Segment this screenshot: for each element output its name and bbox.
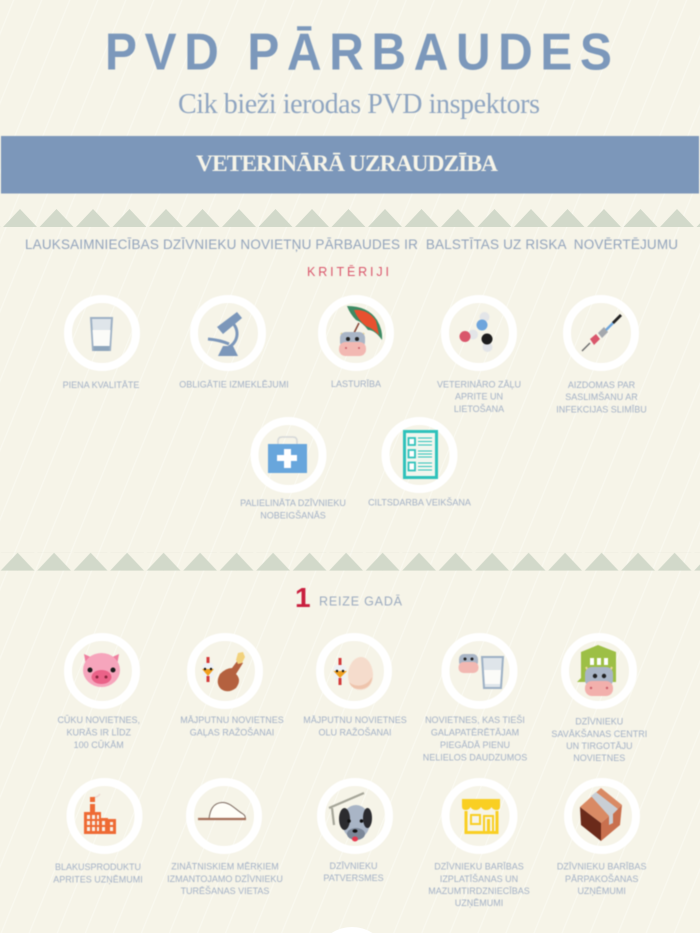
item: piena kvalitāte: PIENA KVALITĀTE <box>63 380 139 390</box>
item: dzīvnieku barības izplatīšanas uzņēmumi: MAZUMTIRDZNIECĪBAS <box>428 886 530 896</box>
item: dzīvnieku barības pārpakošanas uzņēmumi: UZŅĒMUMI <box>577 886 626 896</box>
heading: 1 reize gadā: 1 <box>295 582 311 613</box>
intro text: LAUKSAIMNIECĪBAS DZĪVNIEKU NOVIETŅU PĀRBAUDES IR BALSTĪTAS UZ RISKA NOVĒRTĒJUMU <box>25 237 678 252</box>
partial circle at bottom edge <box>332 927 372 933</box>
item: lasturība <box>322 299 390 389</box>
item: mājputnu novietnes olu ražošanai: MĀJPUTNU NOVIETNES <box>303 715 407 725</box>
item: aizdomas par saslimšanu: INFEKCIJAS SLIMĪBU <box>556 404 647 414</box>
item: lasturība: LASTURĪBA <box>331 379 381 389</box>
item: aizdomas par saslimšanu: SASLIMŠANU AR <box>565 392 638 402</box>
item: dzīvnieku barības izplatīšanas uzņēmumi: IZPLATĪŠANAS UN <box>440 874 518 884</box>
item: novietnes, kas piegādā pienu: NELIELOS DAUDZUMOS <box>423 752 527 762</box>
item: dzīvnieku patversmes <box>321 782 389 883</box>
item: dzīvnieku barības pārpakošanas uzņēmumi <box>557 782 646 896</box>
item: mājputnu novietnes olu ražošanai: OLU RAŽOŠANAI <box>318 728 392 738</box>
item: novietnes, kas piegādā pienu: NOVIETNES, KAS TIEŠI <box>425 715 525 725</box>
item: palielināta dzīvnieku nobeigšanās: PALIELINĀTA DZĪVNIEKU <box>240 498 346 508</box>
item: dzīvnieku barības pārpakošanas uzņēmumi: PĀRPAKOŠANAS <box>565 874 638 884</box>
item: dzīvnieku patversmes: DZĪVNIEKU <box>329 861 378 871</box>
item: dzīvnieku savākšanas centri: SAVĀKŠANAS CENTRI <box>551 729 647 739</box>
item: novietnes, kas piegādā pienu <box>423 637 527 762</box>
item: novietnes, kas piegādā pienu: PIEGĀDĀ PIENU <box>440 740 510 750</box>
item: dzīvnieku savākšanas centri: UN TIRGOTĀJU <box>566 741 632 751</box>
item: aizdomas par saslimšanu: AIZDOMAS PAR <box>568 380 636 390</box>
item: veterināro zāļu aprite: LIETOŠANA <box>454 404 504 414</box>
item: palielināta dzīvnieku nobeigšanās: NOBEIGŠANĀS <box>260 510 326 520</box>
item: veterināro zāļu aprite: APRITE UN <box>455 392 503 402</box>
item: dzīvnieku barības izplatīšanas uzņēmumi <box>428 782 530 908</box>
item: mājputnu novietnes gaļas ražošanai: MĀJPUTNU NOVIETNES <box>180 715 284 725</box>
item: dzīvnieku barības izplatīšanas uzņēmumi: UZŅĒMUMI <box>455 898 503 908</box>
item: mājputnu novietnes gaļas ražošanai: GAĻAS RAŽOŠANAI <box>190 728 274 738</box>
item: cūku novietnes: 100 CŪKĀM <box>74 740 124 750</box>
item: dzīvnieku barības pārpakošanas uzņēmumi: DZĪVNIEKU BARĪBAS <box>557 862 646 872</box>
heading: 1 reize gadā: REIZE GADĀ <box>319 594 403 608</box>
item: dzīvnieku patversmes: PATVERSMES <box>323 873 384 883</box>
item: veterināro zāļu aprite <box>437 299 521 414</box>
item: mājputnu novietnes gaļas ražošanai <box>180 637 284 738</box>
item: zinātniskiem mērķiem izmantojamo dzīvnieku turēšanas vietas: ZINĀTNISKIEM MĒRĶIEM <box>171 862 279 872</box>
banner: veterinārā uzraudzība: VETERINĀRĀ UZRAUDZĪBA <box>196 151 498 177</box>
item: zinātniskiem mērķiem izmantojamo dzīvnieku turēšanas vietas <box>167 782 283 896</box>
item: blakusproduktu aprites uzņēmumi: APRITES UZŅĒMUMI <box>53 875 143 885</box>
item: dzīvnieku barības izplatīšanas uzņēmumi: DZĪVNIEKU BARĪBAS <box>434 862 524 872</box>
item: palielināta dzīvnieku nobeigšanās <box>240 421 346 520</box>
item: blakusproduktu aprites uzņēmumi: BLAKUSPRODUKTU <box>55 862 141 872</box>
item: cūku novietnes: CŪKU NOVIETNES, <box>57 715 140 725</box>
banner: veterinārā uzraudzība <box>1 136 699 194</box>
item: mājputnu novietnes olu ražošanai <box>303 637 407 738</box>
item: zinātniskiem mērķiem izmantojamo dzīvnieku turēšanas vietas: IZMANTOJAMO DZĪVNIEKU <box>167 874 283 884</box>
panel: criteria <box>63 299 647 520</box>
triangle band top <box>0 209 700 227</box>
item: cūku novietnes: KURĀS IR LĪDZ <box>66 728 131 738</box>
heading: kritēriji: KRITĒRIJI <box>307 265 389 279</box>
item: veterināro zāļu aprite: VETERINĀRO ZĀĻU <box>437 380 521 390</box>
item: obligātie izmeklējumi: OBLIGĀTIE IZMEKLĒJUMI <box>179 380 289 390</box>
item: ciltsdarba veikšana: CILTSDARBA VEIKŠANA <box>368 498 471 508</box>
item: cūku novietnes <box>57 637 140 750</box>
item: dzīvnieku savākšanas centri: DZĪVNIEKU <box>575 717 623 727</box>
item: dzīvnieku savākšanas centri: NOVIETNES <box>573 753 625 763</box>
panel: once a year <box>53 637 647 908</box>
item: dzīvnieku savākšanas centri <box>551 637 647 763</box>
subtitle: Cik bieži ierodas PVD inspektors <box>178 89 540 120</box>
item: aizdomas par saslimšanu <box>556 299 647 414</box>
item: piena kvalitāte <box>63 299 139 390</box>
item: novietnes, kas piegādā pienu: GALAPATĒRĒTĀJAM <box>431 728 519 738</box>
title: PVD PĀRBAUDES <box>105 23 612 81</box>
item: obligātie izmeklējumi <box>179 299 289 390</box>
heading: 1 reize gadā <box>295 582 403 613</box>
item: blakusproduktu aprites uzņēmumi <box>53 782 143 885</box>
item: ciltsdarba veikšana <box>368 421 471 508</box>
item: zinātniskiem mērķiem izmantojamo dzīvnieku turēšanas vietas: TURĒŠANAS VIETAS <box>181 886 269 896</box>
triangle band middle <box>0 553 700 571</box>
